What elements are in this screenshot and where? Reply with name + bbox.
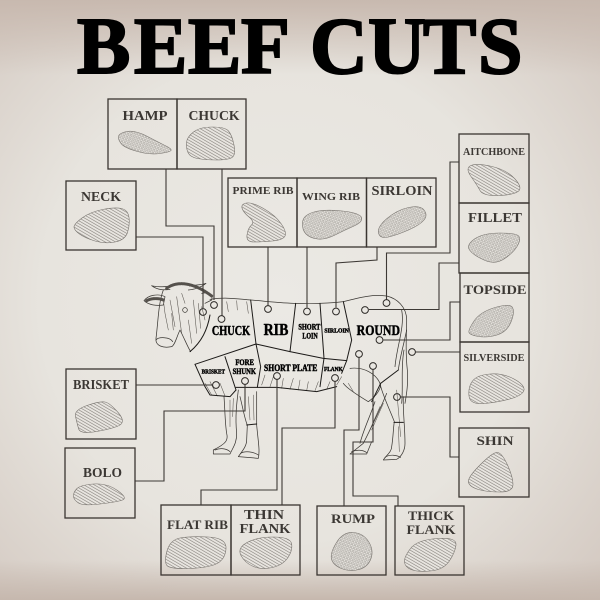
- connector: rump: [344, 351, 362, 506]
- icon: rump cut: [331, 532, 372, 571]
- cut label: brisket: BRISKET: [202, 368, 225, 375]
- label: flat rib: FLAT RIB: [167, 517, 228, 532]
- panel: rump: [317, 506, 386, 575]
- icon: neck cut: [74, 208, 129, 243]
- connector: thin flank: [282, 375, 338, 505]
- panel: wing rib: [297, 178, 366, 247]
- label: wing rib: WING RIB: [302, 191, 361, 203]
- cut label: sirloin: SIRLOIN: [324, 328, 349, 335]
- cow hair texture: [147, 284, 401, 452]
- panel: fillet: [459, 203, 529, 273]
- label: bolo: BOLO: [83, 466, 122, 481]
- connector: bolo: [135, 378, 248, 481]
- cut label: short plate: SHORT PLATE: [264, 363, 317, 373]
- connector: wing rib: [304, 247, 310, 315]
- panel: neck: [66, 181, 136, 250]
- icon: brisket cut: [75, 402, 122, 433]
- cow illustration: [144, 283, 408, 460]
- label: thin flank: FLANK: [240, 522, 291, 537]
- cut section lines: [190, 300, 403, 425]
- connector: flat rib: [201, 373, 280, 505]
- icon: thin flank cut: [240, 537, 292, 569]
- connector: topside: [376, 302, 460, 343]
- cut label: fore shunk: SHUNK: [233, 366, 256, 376]
- icon: fillet cut: [468, 233, 520, 262]
- label: prime rib: PRIME RIB: [232, 185, 294, 197]
- icon: prime rib cut: [242, 203, 286, 242]
- icon: thick flank cut: [404, 538, 456, 571]
- label: topside: TOPSIDE: [464, 282, 526, 297]
- cut label: rib: RIB: [264, 320, 288, 339]
- label: thick flank: THICK: [408, 508, 455, 523]
- connector: neck: [136, 237, 206, 315]
- label: shin: SHIN: [476, 433, 514, 448]
- cut label: flank: FLANK: [324, 366, 343, 373]
- label: aitchbone: AITCHBONE: [463, 146, 525, 158]
- label: chuck: CHUCK: [188, 109, 240, 124]
- panel: topside: [460, 273, 529, 342]
- panel: thin flank: [231, 505, 300, 575]
- label: silverside: SILVERSIDE: [464, 352, 524, 364]
- label: fillet: FILLET: [468, 211, 523, 226]
- icon: shin cut: [468, 452, 513, 492]
- cut label: short loin: SHORT: [298, 321, 320, 331]
- label: rump: RUMP: [331, 511, 375, 526]
- panel: thick flank: [395, 506, 464, 575]
- icon: aitchbone cut: [468, 164, 520, 196]
- cut label: chuck: CHUCK: [212, 323, 251, 338]
- panel: hamp: [108, 99, 177, 169]
- panel: sirloin: [366, 178, 436, 247]
- connector: hamp: [166, 169, 217, 308]
- connector: sirloin: [333, 247, 377, 315]
- label: thin flank: THIN: [244, 508, 284, 523]
- label: sirloin: SIRLOIN: [372, 184, 432, 199]
- icon: silverside cut: [469, 374, 524, 404]
- connector: chuck: [218, 169, 225, 322]
- panel: bolo: [65, 448, 135, 518]
- icon: topside cut: [469, 305, 513, 337]
- icon: chuck cut: [186, 127, 235, 160]
- connector: shin: [394, 394, 459, 457]
- icon: bolo cut: [73, 484, 124, 505]
- panel: shin: [459, 428, 529, 497]
- panel: aitchbone: [459, 134, 529, 203]
- cut label: fore shunk: FORE: [235, 357, 254, 367]
- connector: aitchbone: [383, 162, 459, 306]
- label: thick flank: FLANK: [406, 522, 456, 537]
- cow sketch outline: [144, 283, 408, 460]
- panel: chuck: [177, 99, 246, 169]
- label: hamp: HAMP: [122, 109, 168, 124]
- panel: brisket: [66, 369, 136, 439]
- connector: brisket: [136, 382, 219, 388]
- cut label: short loin: LOIN: [302, 330, 318, 340]
- panel: flat rib: [161, 505, 231, 575]
- connector: prime rib: [265, 247, 271, 312]
- icon: wing rib cut: [302, 210, 362, 239]
- icon: sirloin cut: [378, 207, 426, 238]
- title: BEEF CUTS: [77, 3, 522, 91]
- connector: thick flank: [353, 363, 398, 506]
- icon: flat rib cut: [166, 537, 226, 569]
- connector: silverside: [409, 349, 460, 355]
- label: neck: NECK: [81, 190, 121, 205]
- label: brisket: BRISKET: [73, 378, 130, 393]
- cut label: round: ROUND: [357, 323, 400, 339]
- connector: fillet: [362, 263, 459, 313]
- panel: silverside: [460, 342, 529, 412]
- panel: prime rib: [228, 178, 297, 247]
- icon: hamp cut: [118, 131, 171, 154]
